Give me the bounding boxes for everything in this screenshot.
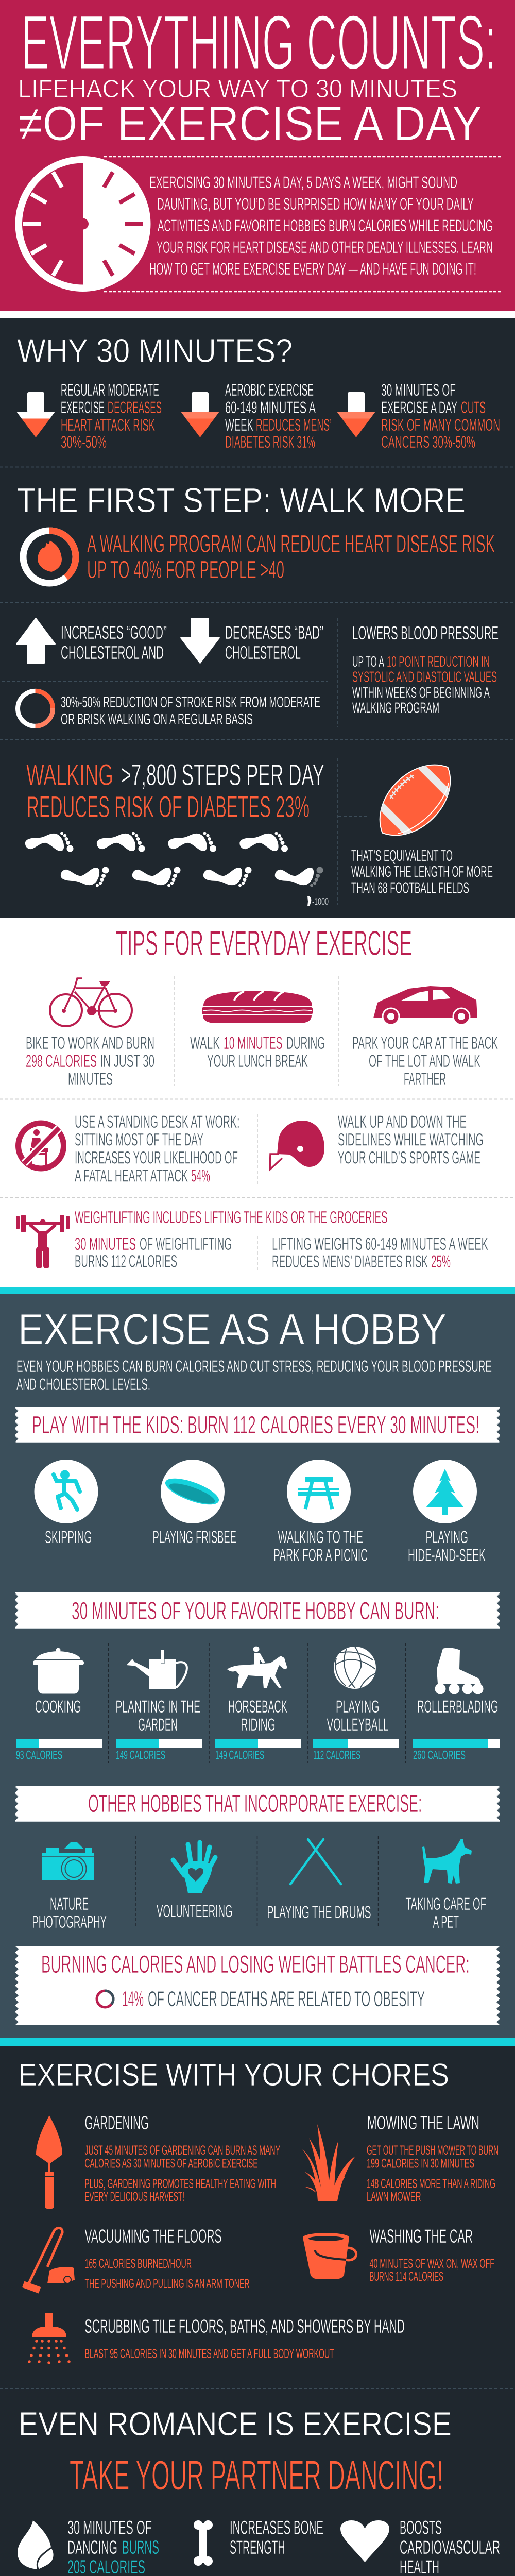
ribbon: favorite hobby bbox=[15, 1592, 500, 1629]
tip: bike: IN JUST 30 bbox=[100, 1052, 154, 1071]
text: good cholesterol bbox=[61, 622, 167, 663]
heading: why 30 minutes: WHY 30 MINUTES? bbox=[17, 332, 293, 369]
labels: kids activities bbox=[45, 1528, 486, 1565]
text: hobby intro bbox=[16, 1357, 492, 1394]
panel: header bbox=[0, 0, 515, 311]
icon: trowel bbox=[36, 2115, 62, 2209]
icon: arrow down 2 bbox=[181, 392, 219, 437]
tip: standing desk: SITTING MOST OF THE DAY bbox=[75, 1130, 203, 1150]
chore: mowing bbox=[367, 2112, 499, 2204]
labels: hobbies: PLAYING bbox=[336, 1697, 379, 1717]
text: blood pressure: WALKING PROGRAM bbox=[352, 700, 439, 716]
tip: lunch break: DURING bbox=[286, 1033, 325, 1053]
icon: camera bbox=[42, 1842, 94, 1881]
chore: washing the car: BURNS 114 CALORIES bbox=[370, 2269, 443, 2284]
legend: one foot equals 1000 steps bbox=[307, 896, 329, 907]
chore: gardening: JUST 45 MINUTES OF GARDENING CAN BURN AS MANY bbox=[84, 2143, 280, 2158]
stat: diabetes: AEROBIC EXERCISE bbox=[225, 381, 314, 399]
stat: cancers bbox=[381, 381, 500, 451]
chore: washing the car bbox=[370, 2226, 494, 2284]
labels: hobbies: RIDING bbox=[241, 1715, 275, 1735]
chore: gardening: GARDENING bbox=[84, 2112, 149, 2133]
labels: hobbies: PLANTING IN THE bbox=[115, 1697, 200, 1717]
tip: bike: MINUTES bbox=[68, 1070, 113, 1089]
chore: vacuuming bbox=[84, 2226, 249, 2291]
stat: heart attack: 30%-50% bbox=[61, 433, 107, 451]
labels: other hobbies: PLAYING THE DRUMS bbox=[267, 1903, 371, 1922]
stat: heart attack: DECREASES bbox=[108, 398, 162, 417]
icon: hand with heart bbox=[173, 1842, 215, 1893]
ribbon: cancer callout bbox=[15, 1946, 500, 2025]
icon: picnic table bbox=[287, 1460, 351, 1523]
labels: kids activities: WALKING TO THE bbox=[278, 1528, 363, 1547]
stat: cancers: 30 MINUTES OF bbox=[381, 381, 456, 399]
icon: football helmet bbox=[270, 1121, 324, 1170]
stat: steps per day: WALKING bbox=[26, 758, 113, 792]
tip: standing desk bbox=[75, 1112, 240, 1186]
stat: heart attack bbox=[61, 381, 162, 451]
chore: vacuuming: 165 CALORIES BURNED/HOUR bbox=[84, 2257, 192, 2271]
legend: one foot equals 1000 steps: -1000 bbox=[312, 896, 329, 907]
tip: weightlifting bbox=[75, 1208, 488, 1272]
bar chart: calories burned: 112 CALORIES bbox=[313, 1749, 360, 1762]
stat: obesity: 14% bbox=[122, 1987, 144, 2011]
text: football fields bbox=[351, 846, 493, 896]
stat: cardiovascular bbox=[400, 2517, 500, 2576]
icon: sandwich bbox=[202, 991, 313, 1023]
tip: lunch break: YOUR LUNCH BREAK bbox=[207, 1052, 308, 1071]
labels: kids activities: PLAYING bbox=[425, 1528, 468, 1547]
icon: arrow up bbox=[16, 618, 55, 663]
icon: horse rider bbox=[227, 1647, 287, 1688]
stat: steps per day: >7,800 STEPS PER DAY bbox=[121, 758, 324, 792]
chore: vacuuming: THE PUSHING AND PULLING IS AN ARM TONER bbox=[84, 2277, 249, 2291]
icon: cancer ring bbox=[97, 1991, 113, 2007]
icon: vacuum bbox=[22, 2228, 75, 2293]
text: good cholesterol: INCREASES “GOOD” bbox=[61, 622, 167, 643]
stat: cancers: CUTS bbox=[461, 398, 486, 417]
tip: weightlifting: 30 MINUTES bbox=[75, 1234, 136, 1254]
heading: romance: EVEN ROMANCE IS EXERCISE bbox=[19, 2405, 452, 2443]
labels: hobbies: COOKING bbox=[35, 1697, 81, 1717]
bar chart: calories burned bbox=[16, 1739, 500, 1762]
stat: dancing calories: BURNS bbox=[122, 2537, 159, 2558]
heading: first step: THE FIRST STEP: WALK MORE bbox=[17, 481, 466, 520]
stat: bone strength: STRENGTH bbox=[230, 2537, 285, 2558]
text: stroke risk: 30%-50% REDUCTION OF STROKE RISK FROM MODERATE bbox=[61, 693, 320, 711]
labels: hobbies: HORSEBACK bbox=[228, 1697, 287, 1717]
stat: diabetes: REDUCES MENS’ bbox=[256, 416, 332, 434]
icon: arrow down 3 bbox=[337, 392, 375, 437]
icon: weightlifter bbox=[16, 1215, 70, 1268]
stat: diabetes bbox=[225, 381, 332, 451]
stat: heart attack: EXERCISE bbox=[61, 398, 105, 417]
tip: bike: 298 CALORIES bbox=[26, 1052, 97, 1071]
title bbox=[18, 0, 496, 151]
ribbon: other hobbies bbox=[15, 1786, 500, 1822]
text: bad cholesterol bbox=[225, 622, 323, 663]
tip: weightlifting: OF WEIGHTLIFTING bbox=[140, 1234, 232, 1254]
icon: heart ring 40 percent bbox=[23, 531, 76, 583]
chore: gardening: PLUS, GARDENING PROMOTES HEALTHY EATING WITH bbox=[84, 2177, 276, 2191]
stat: dancing calories: 30 MINUTES OF bbox=[67, 2517, 152, 2538]
callout: walking program bbox=[87, 531, 495, 584]
icon: footprints bbox=[25, 832, 323, 887]
bar chart: calories burned: 93 CALORIES bbox=[16, 1749, 62, 1762]
icon: bone bbox=[194, 2520, 213, 2566]
chore: scrubbing: BLAST 95 CALORIES IN 30 MINUTES AND GET A FULL BODY WORKOUT bbox=[84, 2347, 334, 2361]
icon: shower bbox=[28, 2313, 71, 2364]
labels: other hobbies: NATURE bbox=[50, 1894, 89, 1914]
icon: flame dancing bbox=[18, 2520, 54, 2569]
tip: standing desk: USE A STANDING DESK AT WORK: bbox=[75, 1112, 240, 1132]
chore: vacuuming: VACUUMING THE FLOORS bbox=[84, 2226, 221, 2247]
tip: lunch break: WALK bbox=[190, 1033, 220, 1053]
labels: kids activities: PARK FOR A PICNIC bbox=[273, 1546, 368, 1565]
panel: chores and romance bbox=[0, 2046, 515, 2576]
labels: kids activities: SKIPPING bbox=[45, 1528, 92, 1547]
tip: weightlifting: 25% bbox=[431, 1252, 451, 1272]
tip: standing desk: A FATAL HEART ATTACK bbox=[75, 1166, 188, 1186]
labels: kids activities: PLAYING FRISBEE bbox=[152, 1528, 236, 1547]
tip: bike bbox=[26, 1033, 154, 1089]
text: bad cholesterol: CHOLESTEROL bbox=[225, 642, 301, 663]
icon: dog bbox=[422, 1839, 472, 1884]
stat: steps per day: REDUCES RISK OF DIABETES 23% bbox=[27, 790, 310, 824]
stat: bone strength: INCREASES BONE bbox=[230, 2517, 323, 2538]
labels: hobbies: GARDEN bbox=[138, 1715, 178, 1735]
icon: volleyball bbox=[334, 1647, 376, 1689]
stat: diabetes: DIABETES RISK 31% bbox=[225, 433, 315, 451]
tip: standing desk: INCREASES YOUR LIKELIHOOD OF bbox=[75, 1148, 238, 1167]
icon: car bbox=[373, 986, 477, 1025]
tip: standing desk: 54% bbox=[191, 1166, 210, 1186]
stat: cancers: EXERCISE A DAY bbox=[381, 398, 457, 417]
tip: park: FARTHER bbox=[404, 1070, 446, 1089]
text: blood pressure bbox=[352, 622, 499, 716]
icon: drumsticks bbox=[290, 1839, 341, 1884]
labels: other hobbies: PHOTOGRAPHY bbox=[32, 1912, 107, 1932]
labels: hobbies bbox=[35, 1697, 499, 1735]
stat: diabetes: 60-149 MINUTES A bbox=[225, 398, 316, 417]
heading: chores: EXERCISE WITH YOUR CHORES bbox=[19, 2057, 449, 2092]
icon: pine tree bbox=[413, 1460, 477, 1523]
labels: other hobbies: A PET bbox=[433, 1912, 459, 1932]
icon: rollerblade bbox=[435, 1648, 483, 1694]
stat: dancing calories: DANCING bbox=[67, 2537, 117, 2558]
bar chart: calories burned: 149 CALORIES bbox=[116, 1749, 165, 1762]
icon: frisbee bbox=[161, 1460, 225, 1523]
stat: heart attack: REGULAR MODERATE bbox=[61, 381, 159, 399]
icon: arrow down bbox=[181, 618, 219, 663]
chore: gardening bbox=[84, 2112, 280, 2204]
stat: cardiovascular: BOOSTS bbox=[400, 2517, 442, 2538]
bar chart: calories burned: 149 CALORIES bbox=[215, 1749, 264, 1762]
title: ≠OF EXERCISE A DAY bbox=[18, 96, 482, 151]
icon: heart bbox=[340, 2520, 389, 2562]
labels: other hobbies bbox=[32, 1894, 486, 1932]
icon: arrow down 1 bbox=[16, 392, 55, 437]
text: stroke risk bbox=[61, 693, 320, 728]
icon: bucket bbox=[303, 2233, 356, 2279]
icon: no sitting bbox=[19, 1123, 64, 1168]
panel: exercise as a hobby bbox=[0, 1287, 515, 2046]
tip: lunch break bbox=[190, 1033, 325, 1071]
icon: football bbox=[379, 765, 451, 836]
chore: gardening: EVERY DELICIOUS HARVEST! bbox=[84, 2190, 184, 2204]
text: blood pressure: UP TO A bbox=[352, 654, 384, 670]
icon: cooking pot bbox=[33, 1648, 84, 1694]
bar chart: calories burned: 260 CALORIES bbox=[413, 1749, 466, 1762]
labels: other hobbies: VOLUNTEERING bbox=[157, 1902, 233, 1921]
tip: park bbox=[352, 1033, 498, 1089]
icon: skipping bbox=[34, 1460, 98, 1523]
tip: bike: BIKE TO WORK AND BURN bbox=[26, 1033, 154, 1053]
intro text bbox=[149, 173, 493, 278]
tip: weightlifting: BURNS 112 CALORIES bbox=[75, 1252, 177, 1272]
tip: sidelines bbox=[338, 1112, 484, 1167]
icon: grass bbox=[302, 2124, 355, 2201]
text: stroke risk: OR BRISK WALKING ON A REGULAR BASIS bbox=[61, 710, 253, 728]
icon: bicycle bbox=[50, 978, 132, 1027]
stat: steps per day bbox=[26, 758, 324, 824]
chore: gardening: CALORIES AS 30 MINUTES OF AEROBIC EXERCISE bbox=[84, 2157, 258, 2171]
stat: heart attack: HEART ATTACK RISK bbox=[61, 416, 155, 434]
heading: hobby: EXERCISE AS A HOBBY bbox=[18, 1305, 447, 1353]
panel: tips for everyday exercise bbox=[0, 918, 515, 1287]
stat: dancing calories bbox=[67, 2517, 159, 2576]
tip: lunch break: 10 MINUTES bbox=[224, 1033, 282, 1053]
icon: watering can bbox=[127, 1650, 187, 1689]
stat: diabetes: WEEK bbox=[225, 416, 253, 434]
labels: hobbies: VOLLEYBALL bbox=[327, 1715, 388, 1735]
callout: walking program: UP TO 40% FOR PEOPLE >40 bbox=[87, 556, 284, 584]
chore: mowing: LAWN MOWER bbox=[367, 2190, 421, 2204]
panel: why 30 minutes and walking bbox=[0, 318, 515, 918]
text: hobby intro: AND CHOLESTEROL LEVELS. bbox=[16, 1375, 150, 1394]
icon: stroke ring bbox=[18, 691, 53, 726]
title: LIFEHACK YOUR WAY TO 30 MINUTES bbox=[18, 75, 457, 103]
stat: bone strength bbox=[230, 2517, 323, 2558]
chore: scrubbing bbox=[84, 2316, 405, 2361]
text: good cholesterol: CHOLESTEROL AND bbox=[61, 642, 164, 663]
icon: half clock bbox=[15, 156, 150, 292]
text: bad cholesterol: DECREASES “BAD” bbox=[225, 622, 323, 643]
